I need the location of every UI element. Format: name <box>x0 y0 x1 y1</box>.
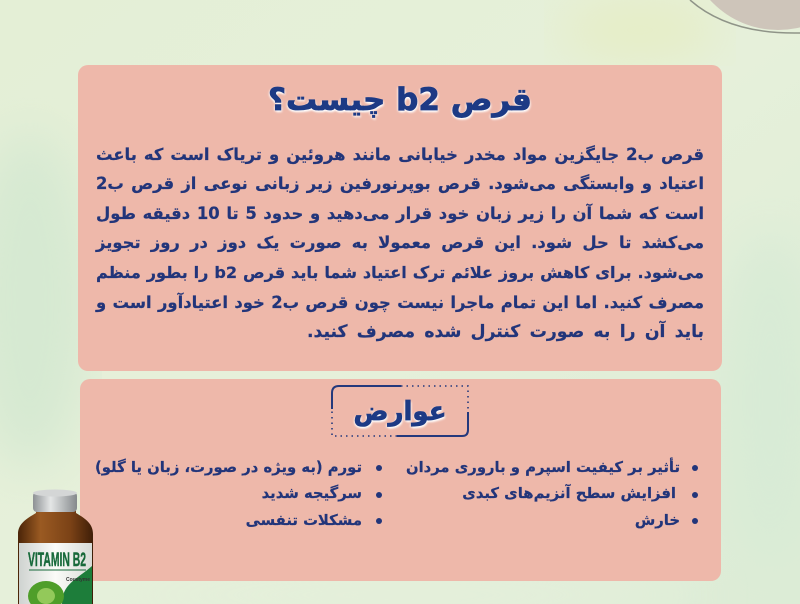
text block: description: اعتیاد و وابستگی می‌شود. قرص بوپرنورفین زیر زبانی نوعی از قرص ب2 <box>96 174 704 193</box>
decorative circle at top right <box>686 0 800 33</box>
list: left column: مشکلات تنفسی <box>246 512 362 529</box>
text block: description: می‌شود. برای کاهش بروز علائم ترک اعتیاد شما باید قرص b2 را بطور منظم <box>96 263 704 282</box>
text block: description: می‌کشد تا حل شود. این قرص معمولا به صورت یک دوز در روز تجویز <box>96 233 704 252</box>
text block: description: باید آن را به صورت کنترل شده مصرف کنید. <box>307 322 704 342</box>
list: right column: خارش <box>635 512 680 529</box>
icon: vitamin b2 bottle <box>18 490 93 604</box>
list: right column: افزایش سطح آنزیم‌های کبدی <box>462 485 676 502</box>
list: left column: تورم (به ویژه در صورت، زبان یا گلو) <box>95 459 362 476</box>
list: right column <box>406 457 698 529</box>
list: right column: تأثیر بر کیفیت اسپرم و باروری مردان <box>406 459 680 476</box>
text block: description: قرص ب2 جایگزین مواد مخدر خیابانی مانند هروئین و تریاک است که باعث <box>96 145 704 164</box>
list: left column: سرگیجه شدید <box>262 485 362 502</box>
text block: description: مصرف کنید. اما این تمام ماجرا نیست چون قرص ب2 خود اعتیادآور است و <box>96 293 704 312</box>
panel: side effects <box>80 379 721 581</box>
text block: description: است که شما آن را زیر زبان خود قرار می‌دهید و حدود 5 تا 10 دقیقه طول <box>96 204 704 223</box>
heading: what is b2: قرص b2 چیست؟ <box>268 82 532 118</box>
panel: what is b2 tablet <box>78 65 722 371</box>
text block: description <box>95 145 704 342</box>
icon: vitamin b2 bottle: Coustyme <box>66 577 90 583</box>
heading: side effects: عوارض <box>354 397 446 427</box>
list: left column <box>95 458 382 529</box>
heading frame: side effects <box>331 385 469 437</box>
